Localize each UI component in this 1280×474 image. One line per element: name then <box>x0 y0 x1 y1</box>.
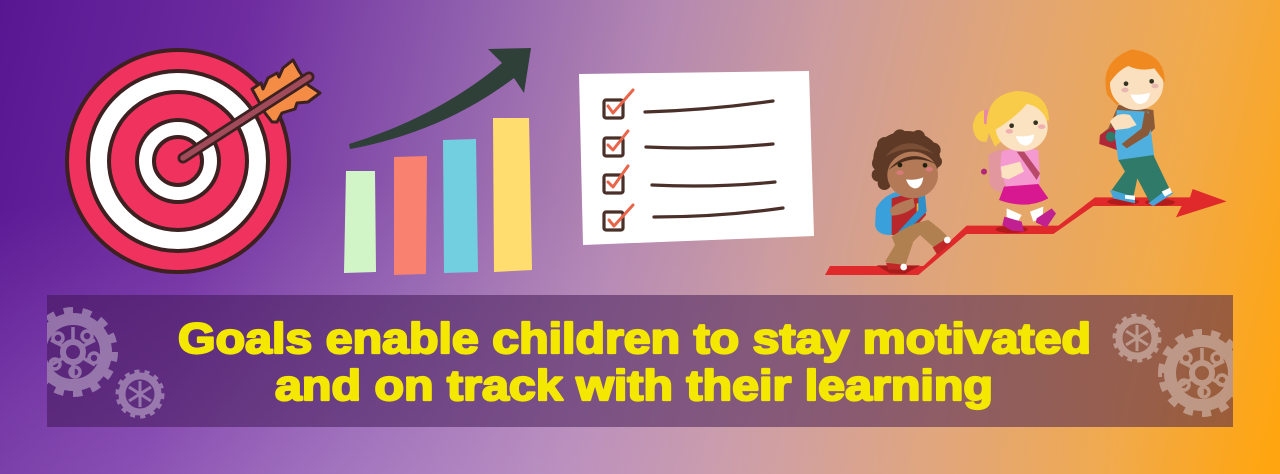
gear cluster right <box>1115 316 1242 413</box>
bar: blue <box>443 139 478 273</box>
icon: small gear left <box>118 372 162 416</box>
icon: large gear left <box>32 311 114 393</box>
child: girl with blonde ponytail <box>973 91 1056 233</box>
curly hair <box>872 129 942 190</box>
arrow: rising trend <box>349 48 531 149</box>
child: boy with curly hair <box>872 129 952 274</box>
icon: target with arrow <box>67 50 320 272</box>
icon: small gear right <box>1115 316 1159 360</box>
heading: Goals enable children to stay motivated <box>178 315 1091 363</box>
checklist item 2 <box>604 131 773 156</box>
arrow: red stepped path <box>825 189 1227 275</box>
heading <box>178 315 1091 410</box>
illustration: children walking up a red arrow <box>825 49 1227 275</box>
bar: yellow <box>493 118 532 272</box>
checklist item 4 <box>604 205 783 230</box>
panel: banner <box>32 295 1242 427</box>
checklist item 1 <box>604 90 773 118</box>
bar chart with rising arrow <box>344 48 532 275</box>
gear cluster left <box>32 311 162 416</box>
panel: checklist <box>579 71 814 245</box>
child: boy with orange hair <box>1099 49 1175 206</box>
bar: coral <box>394 156 427 275</box>
bar: green <box>344 171 376 273</box>
checklist item 3 <box>604 166 775 193</box>
icon: large gear right <box>1162 333 1242 413</box>
heading: and on track with their learning <box>275 362 993 410</box>
